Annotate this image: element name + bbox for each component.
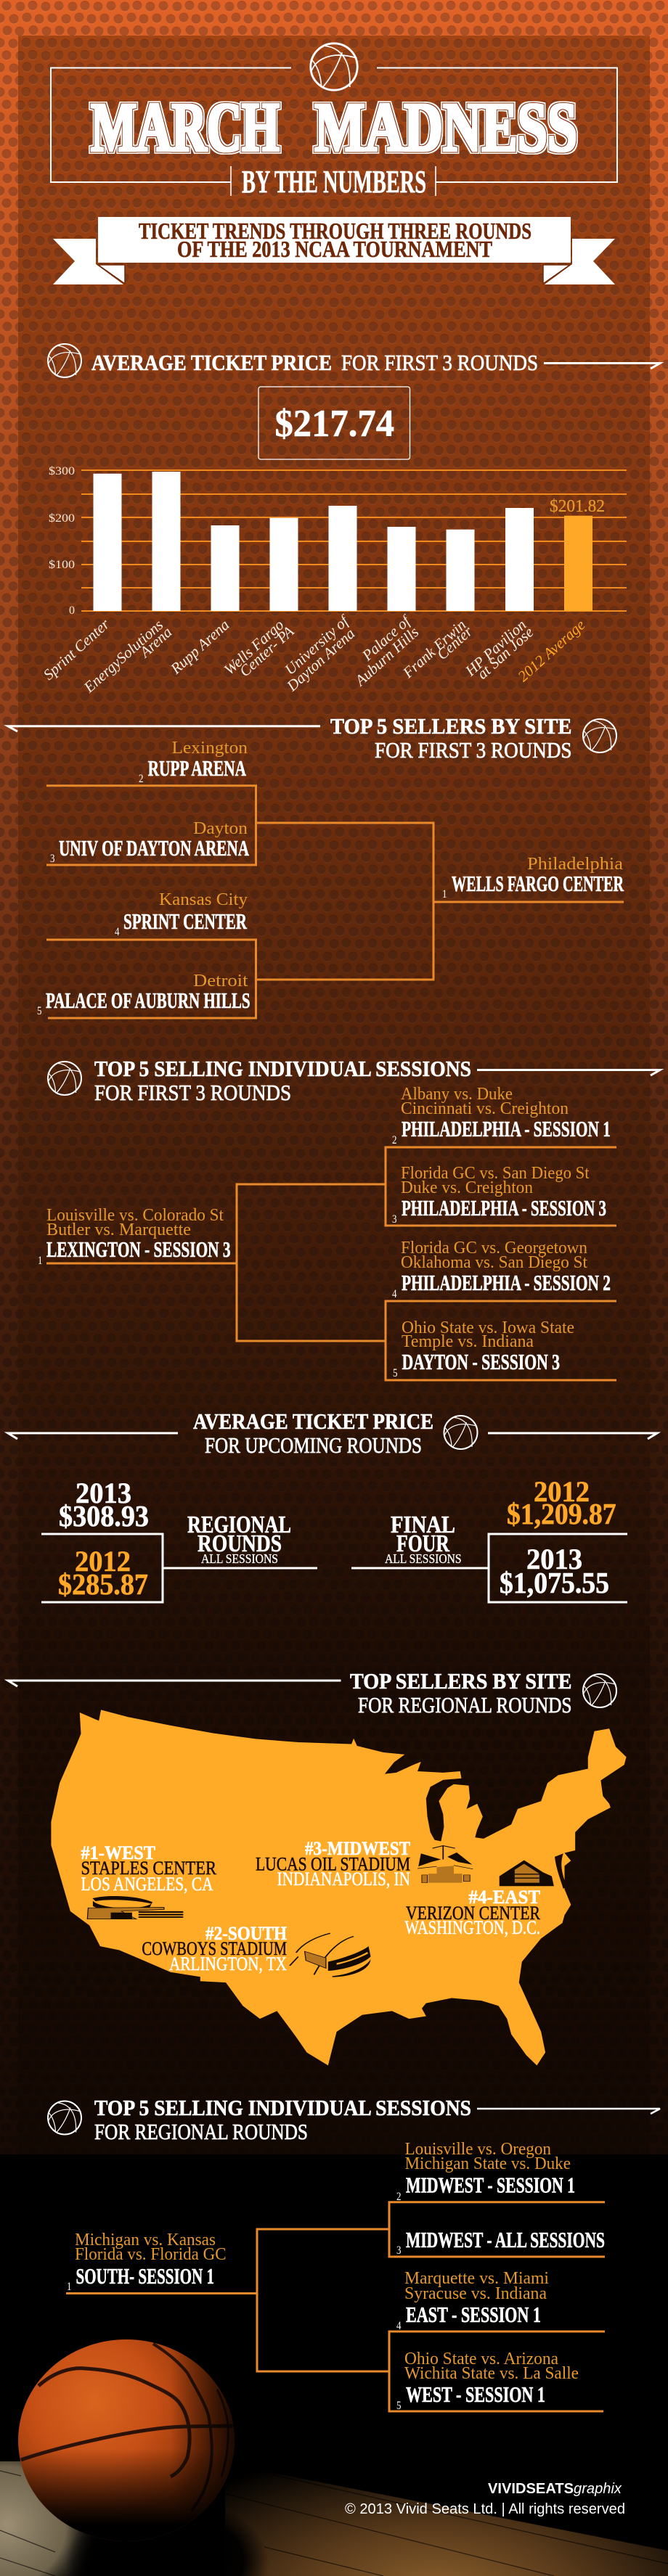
entry: East session 1: 4	[396, 2320, 401, 2332]
callout: average price	[258, 387, 410, 459]
regional rounds label: ALL SESSIONS	[201, 1551, 278, 1566]
entry: Wells Fargo Center	[442, 855, 624, 901]
entry: Philadelphia session 1: 2	[392, 1134, 396, 1147]
label: West: #1-WEST	[81, 1842, 155, 1863]
entry: East session 1: EAST - SESSION 1	[406, 2302, 541, 2327]
entry: South session 1: Michigan vs. Kansas	[75, 2231, 216, 2249]
copyright: © 2013 Vivid Seats Ltd. | All rights reserved	[345, 2501, 625, 2517]
x axis labels: Wells Fargo	[221, 616, 287, 678]
panel: top 5 sellers by site	[8, 714, 624, 1018]
final four 2012 price: 2012	[534, 1475, 590, 1508]
final four 2013 price: $1,075.55	[500, 1566, 609, 1599]
entry: Sprint Center	[115, 890, 248, 938]
2012 value label: $201.82	[550, 497, 605, 516]
ribbon text line 1: TICKET TRENDS THROUGH THREE ROUNDS	[139, 218, 531, 244]
entry: Palace of Auburn Hills: PALACE OF AUBURN HILLS	[46, 988, 250, 1013]
icon: Verizon Center	[500, 1861, 554, 1886]
regional 2012 price: $285.87	[58, 1567, 148, 1601]
label: Midwest: #3-MIDWEST	[305, 1838, 410, 1859]
entry: East session 1: Syracuse vs. Indiana	[404, 2284, 547, 2303]
entry: Dayton session 3: Ohio State vs. Iowa State	[402, 1318, 574, 1337]
arrow	[477, 2109, 660, 2114]
entry: Sprint Center: 4	[115, 926, 119, 938]
entry: Palace of Auburn Hills: 5	[37, 1005, 42, 1017]
entry: Rupp Arena: RUPP ARENA	[148, 755, 246, 781]
regional 2013 price: 2013	[76, 1477, 131, 1509]
floor	[0, 2461, 668, 2576]
entry: Palace of Auburn Hills	[37, 972, 250, 1017]
entry: Dayton session 3: DAYTON - SESSION 3	[402, 1349, 560, 1374]
label: South: #2-SOUTH	[205, 1923, 287, 1944]
final four bracket lines	[351, 1534, 627, 1602]
entry: Philadelphia session 2	[392, 1239, 611, 1300]
icon: basketball	[444, 1416, 478, 1449]
entry: Univ of Dayton Arena: 3	[50, 853, 55, 865]
x axis labels: University of	[281, 611, 354, 678]
entry: West session 1: 5	[396, 2400, 401, 2412]
final four label	[385, 1511, 462, 1566]
heading: TOP 5 SELLERS BY SITE	[330, 714, 572, 739]
entry: Philadelphia session 3: Florida GC vs. San Diego St	[401, 1164, 590, 1183]
title frame lower ticks	[231, 166, 436, 196]
panel: top 5 selling individual sessions first 3 rounds	[38, 1057, 660, 1380]
title: MADNESS	[314, 89, 577, 166]
x axis labels: Frank Erwin	[399, 616, 469, 682]
x axis labels: Dayton Arena	[282, 625, 358, 695]
regional 2013 price: $308.93	[59, 1499, 149, 1533]
entry: Sprint Center: Kansas City	[159, 890, 248, 909]
y axis labels: $200	[49, 512, 75, 525]
title panel	[51, 44, 617, 284]
regional 2013 price	[59, 1477, 149, 1533]
label: East: WASHINGTON, D.C.	[405, 1917, 540, 1938]
heading: FOR UPCOMING ROUNDS	[205, 1433, 422, 1458]
heading	[193, 1409, 433, 1458]
x axis labels	[40, 611, 588, 697]
icon: basketball	[48, 1062, 81, 1095]
entry: Rupp Arena: 2	[139, 773, 144, 785]
entry: Midwest session 1: 2	[396, 2191, 401, 2203]
entry: Lexington session 3	[38, 1206, 231, 1267]
title: MARCH	[91, 89, 280, 166]
heading: FOR REGIONAL ROUNDS	[94, 2120, 308, 2144]
subtitle: BY THE NUMBERS	[242, 164, 426, 200]
final four 2013 price	[500, 1543, 609, 1599]
regional 2012 price: 2012	[75, 1545, 131, 1578]
heading: TOP 5 SELLING INDIVIDUAL SESSIONS	[94, 2096, 471, 2120]
callout: average price: $217.74	[274, 403, 394, 445]
x axis labels: Center	[433, 622, 476, 663]
heading: FOR FIRST 3 ROUNDS	[341, 350, 538, 375]
entry: Lexington session 3: Butler vs. Marquette	[46, 1221, 191, 1239]
panel: average ticket price upcoming rounds	[8, 1409, 657, 1602]
icon: Cowboys Stadium	[290, 1933, 371, 1977]
icon: Lucas Oil Stadium	[418, 1846, 473, 1883]
regional rounds label: ROUNDS	[197, 1530, 282, 1557]
x axis labels: EnergySolutions	[80, 616, 166, 697]
heading: TOP SELLERS BY SITE	[350, 1669, 572, 1694]
entry: Philadelphia session 1: Albany vs. Duke	[401, 1085, 513, 1104]
label: West: STAPLES CENTER	[81, 1858, 217, 1879]
arrow	[544, 363, 660, 369]
y axis labels: 0	[69, 604, 75, 617]
panel: top 5 selling individual sessions regional rounds	[48, 2096, 660, 2412]
entry: Rupp Arena: Lexington	[171, 739, 248, 758]
x axis labels: Auburn Hills	[351, 623, 422, 690]
entry: South session 1	[67, 2231, 227, 2293]
entry: Univ of Dayton Arena	[50, 819, 249, 865]
bracket lines	[46, 1147, 616, 1380]
icon: basketball	[583, 1674, 616, 1707]
entry: Midwest all sessions: 3	[396, 2244, 401, 2257]
entry: West session 1: Ohio State vs. Arizona	[404, 2350, 558, 2368]
x axis labels: HP Pavilion	[461, 616, 529, 680]
entry: Midwest session 1: Louisville vs. Oregon	[405, 2140, 551, 2159]
final four 2013 price: 2013	[526, 1543, 582, 1575]
entry: Philadelphia session 1	[392, 1085, 611, 1147]
x axis labels: Sprint Center	[40, 615, 113, 684]
label: South: ARLINGTON, TX	[169, 1953, 287, 1974]
chesapeake bay	[555, 1853, 566, 1889]
x axis labels: Palace of	[358, 611, 415, 665]
entry: Philadelphia session 3	[392, 1164, 606, 1226]
entry: Rupp Arena	[139, 739, 248, 785]
label: East: VERIZON CENTER	[406, 1903, 541, 1924]
icon: basketball	[311, 44, 357, 90]
entry: South session 1: SOUTH- SESSION 1	[76, 2263, 214, 2289]
entry: Univ of Dayton Arena: UNIV OF DAYTON ARENA	[59, 835, 249, 861]
entry: West session 1: WEST - SESSION 1	[406, 2382, 545, 2407]
y axis labels	[49, 465, 75, 617]
entry: Lexington session 3: LEXINGTON - SESSION 3	[46, 1236, 231, 1262]
heading: AVERAGE TICKET PRICE	[193, 1409, 433, 1434]
panel: average ticket price first 3 rounds	[40, 344, 660, 697]
entry: Midwest all sessions	[396, 2227, 605, 2257]
bar chart	[40, 465, 627, 697]
icon: basketball	[48, 344, 81, 377]
label: Midwest	[256, 1838, 410, 1890]
bars	[93, 472, 592, 611]
ribbon banner	[53, 217, 615, 284]
bracket lines	[46, 786, 624, 1018]
heading	[350, 1669, 572, 1718]
y axis labels: $300	[49, 465, 75, 477]
heading: TOP 5 SELLING INDIVIDUAL SESSIONS	[94, 1057, 471, 1081]
x axis labels: 2012 Average	[514, 616, 588, 685]
final four 2012 price: $1,209.87	[507, 1497, 616, 1530]
x axis labels: Arena	[135, 623, 175, 662]
entry: Philadelphia session 3: Duke vs. Creighton	[401, 1178, 533, 1197]
icon: basketball	[48, 2101, 81, 2135]
label: West: LOS ANGELES, CA	[81, 1874, 213, 1895]
entry: East session 1	[396, 2269, 549, 2332]
icon: Staples Center	[87, 1896, 183, 1919]
map of USA	[51, 1710, 627, 2065]
entry: East session 1: Marquette vs. Miami	[404, 2269, 549, 2288]
final four 2012 price	[507, 1475, 616, 1530]
final four label: FINAL	[391, 1511, 455, 1538]
title	[91, 89, 577, 166]
entry: West session 1	[396, 2350, 579, 2412]
label: South	[142, 1923, 287, 1974]
heading	[330, 714, 572, 763]
entry: Lexington session 3: Louisville vs. Colorado St	[46, 1206, 224, 1225]
label: South: COWBOYS STADIUM	[142, 1938, 287, 1959]
x axis labels: Rupp Arena	[166, 616, 232, 678]
brand line: VIVIDSEATSgraphix	[488, 2481, 622, 2497]
title frame	[51, 68, 617, 182]
ribbon right tail	[545, 239, 615, 284]
entry: Palace of Auburn Hills: Detroit	[193, 972, 248, 990]
entry: Wells Fargo Center: 1	[442, 888, 447, 901]
label: East	[405, 1887, 541, 1938]
arrow	[8, 726, 320, 731]
arrow	[477, 1070, 660, 1075]
label: East: #4-EAST	[469, 1887, 540, 1908]
ribbon left tail	[53, 239, 123, 284]
heading: FOR FIRST 3 ROUNDS	[94, 1080, 291, 1105]
entry: Midwest session 1	[396, 2140, 575, 2203]
panel: basketball photo and floor	[0, 2337, 668, 2576]
ribbon right fold	[543, 265, 570, 284]
label: Midwest: INDIANAPOLIS, IN	[277, 1869, 410, 1890]
label: West	[81, 1842, 217, 1895]
heading	[94, 1057, 471, 1105]
entry: Philadelphia session 3: 3	[392, 1213, 396, 1226]
ribbon left fold	[98, 265, 125, 284]
label: Midwest: LUCAS OIL STADIUM	[256, 1853, 410, 1875]
x axis labels: Center- PA	[236, 623, 297, 680]
bracket lines	[66, 2202, 605, 2411]
left arrow	[8, 1433, 178, 1439]
right arrow	[488, 1433, 657, 1439]
heading	[91, 350, 538, 375]
ribbon body	[98, 217, 571, 263]
ribbon text line 2: OF THE 2013 NCAA TOURNAMENT	[177, 236, 492, 262]
regional 2012 price	[58, 1545, 148, 1601]
floor shadow	[65, 2496, 269, 2576]
heading: FOR FIRST 3 ROUNDS	[375, 738, 572, 763]
x axis labels: at San Jose	[473, 623, 537, 683]
entry: Sprint Center: SPRINT CENTER	[123, 908, 247, 934]
final four label: ALL SESSIONS	[385, 1551, 462, 1566]
entry: Philadelphia session 2: Florida GC vs. Georgetown	[401, 1239, 587, 1258]
entry: South session 1: Florida vs. Florida GC	[75, 2245, 227, 2264]
entry: South session 1: 1	[67, 2281, 71, 2293]
regional rounds label	[187, 1511, 291, 1566]
entry: Philadelphia session 1: Cincinnati vs. Creighton	[401, 1099, 569, 1118]
regional rounds label: REGIONAL	[187, 1511, 291, 1538]
entry: Dayton session 3: Temple vs. Indiana	[402, 1332, 534, 1351]
arrow	[8, 1681, 341, 1686]
basketball photo	[15, 2337, 240, 2547]
icon: basketball	[583, 719, 616, 752]
final four label: FOUR	[396, 1530, 449, 1557]
entry: Dayton session 3	[393, 1318, 574, 1379]
heading	[94, 2096, 471, 2144]
heading: FOR REGIONAL ROUNDS	[358, 1693, 572, 1718]
entry: Philadelphia session 2: 4	[392, 1288, 396, 1300]
footer credits	[345, 2481, 625, 2517]
entry: Philadelphia session 2: Oklahoma vs. San Diego St	[401, 1253, 587, 1272]
entry: Lexington session 3: 1	[38, 1255, 42, 1267]
y axis labels: $100	[49, 559, 75, 571]
heading: AVERAGE TICKET PRICE	[91, 350, 332, 375]
panel: top sellers regional rounds map	[8, 1669, 627, 2065]
entry: Wells Fargo Center: Philadelphia	[527, 855, 623, 874]
entry: Dayton session 3: 5	[393, 1367, 398, 1379]
entry: Univ of Dayton Arena: Dayton	[193, 819, 248, 838]
regional bracket lines	[41, 1534, 317, 1602]
entry: Midwest session 1: Michigan State vs. Duke	[405, 2154, 571, 2173]
entry: Midwest session 1: MIDWEST - SESSION 1	[406, 2173, 575, 2197]
entry: West session 1: Wichita State vs. La Salle	[404, 2364, 579, 2383]
